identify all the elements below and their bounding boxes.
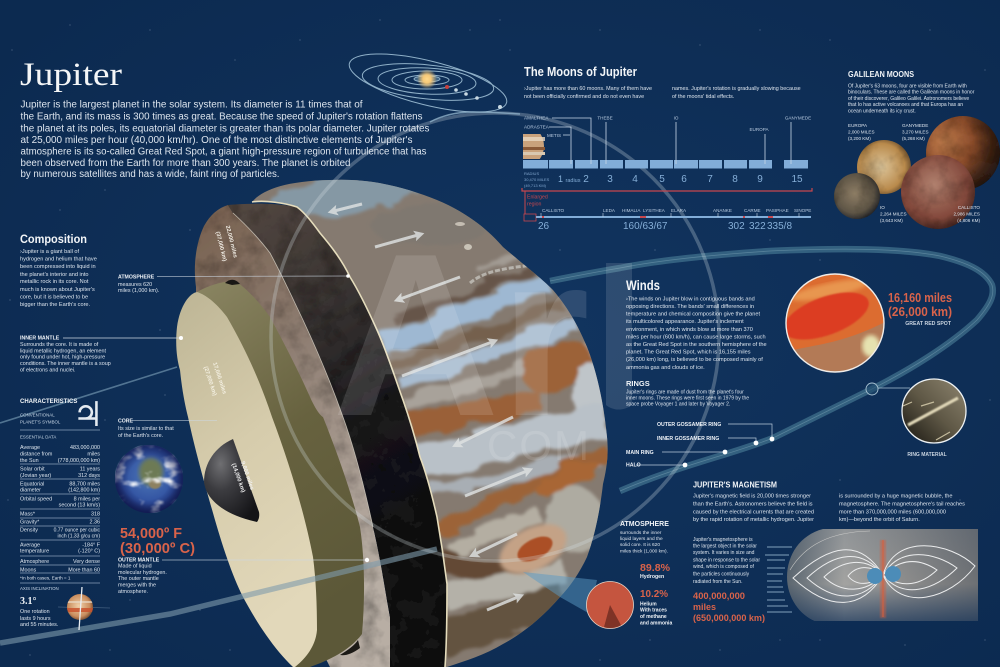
callout: inner mantle: Surrounds the core. It is made of	[20, 342, 99, 348]
outer moons scale: PASIPHAE	[766, 208, 789, 213]
moon leader lines	[549, 118, 791, 164]
data table: Moons	[20, 568, 36, 574]
callout: inner mantle: INNER MANTLE	[20, 336, 60, 342]
callout: atmosphere	[118, 274, 350, 294]
text: composition: ›Jupiter is a giant ball of	[20, 249, 80, 255]
intro text: Jupiter is the largest planet in the solar system. Its diameter is 11 times that of	[20, 100, 363, 110]
panel: atmosphere composition: surrounds the inner	[620, 530, 662, 536]
solar wind arrows	[765, 547, 792, 612]
data table: second (13 km/s)	[59, 502, 100, 508]
panel: Jupiter's magnetism: than the Earth's. Astronomers believe the field is	[693, 502, 813, 508]
outer moons scale: CARME	[744, 208, 761, 213]
outer moons scale: 322	[749, 221, 766, 232]
intro text	[20, 100, 430, 180]
moon labels: AMALTHEA	[524, 116, 549, 120]
panel: winds: environment, in which winds blow at more than 370	[626, 327, 753, 333]
panel: Galilean moons: GALILEAN MOONS	[848, 70, 915, 79]
moon labels: RADIUS	[524, 171, 539, 176]
outer moons scale: 335/8	[767, 221, 792, 232]
panel: Jupiter's magnetism	[693, 480, 978, 623]
data table: 0.77 ounce per cubic	[54, 528, 100, 534]
data table: Gravity*	[20, 520, 40, 526]
panel: Jupiter's magnetism: caused by the electrical currents that are created	[693, 510, 814, 516]
ring crossing in front of the planet	[0, 549, 437, 643]
data table: Average	[20, 445, 40, 451]
orbit radius numbers: 8	[732, 174, 738, 185]
panel: atmosphere composition: Helium	[640, 602, 657, 608]
layer measurement labels: (37,000 km)	[214, 231, 227, 262]
panel: composition	[20, 234, 97, 308]
intro text: the planet at its poles, its equatorial diameter is greater than its polar diameter. Jupiter rotates	[20, 124, 430, 134]
pie chart: atmosphere composition	[586, 582, 634, 629]
panel: Jupiter's magnetism: radiated from the Sun.	[693, 579, 742, 585]
moon labels: (5,268 KM)	[902, 136, 925, 141]
layer measurement labels: 17,000 miles	[211, 362, 227, 395]
data table: (Jovian year)	[20, 473, 51, 479]
callout: core: of the Earth's core.	[118, 433, 163, 439]
outer moons scale: 160/63/67	[623, 221, 668, 232]
panel: characteristics: CONVENTIONAL	[20, 412, 55, 418]
panel: winds	[626, 277, 767, 371]
data table: 11 years	[80, 466, 100, 472]
layer: cream outer mantle	[176, 292, 317, 667]
panel: winds: Winds	[626, 277, 660, 293]
panel: atmosphere composition: and ammonia	[640, 620, 672, 626]
data table: diameter	[20, 488, 41, 494]
panel: Galilean moons: Of Jupiter's 63 moons, four are visible from Earth with	[848, 84, 967, 90]
orbit radius numbers: 5	[659, 174, 665, 185]
panel: Galilean moons: ocean underneath its icy crust.	[848, 108, 916, 114]
callout: atmosphere: ATMOSPHERE	[118, 274, 155, 280]
stat: Great Red Spot size: 16,160 miles	[888, 291, 952, 305]
stat: core temperature: 54,000º F	[120, 525, 182, 542]
data table: More than 60	[68, 568, 100, 574]
panel: winds: (26,000 km) long, is believed to be composed mainly of	[626, 357, 763, 363]
stat: core temperature: (30,000º C)	[120, 540, 195, 557]
data table: -184° F	[82, 542, 101, 548]
data table: Atmosphere	[20, 559, 49, 565]
stat: magnetosphere size	[693, 591, 765, 623]
stat: magnetosphere size: miles	[693, 602, 716, 612]
moon labels: ADRASTEA	[524, 124, 550, 130]
intro text: at 25,000 miles per hour (40,000 km/hr). One of the most distinctive elements of Jupiter's	[20, 135, 412, 146]
moon labels: 3,270 MILES	[902, 130, 929, 134]
panel: Jupiter's magnetism: Jupiter's magnetosphere is	[693, 537, 753, 543]
panel: Jupiter's magnetism: Jupiter's magnetic field is 20,000 times stronger	[693, 494, 811, 500]
ring labels and leaders: INNER GOSSAMER RING	[657, 436, 719, 442]
panel: rings: inner moons. These rings were first seen in 1979 by the	[626, 396, 749, 402]
text: composition: metallic rock in its core. Not	[20, 279, 89, 285]
moon labels: IO	[880, 205, 885, 210]
data table: Average	[20, 542, 40, 548]
callout: core: CORE	[118, 418, 134, 424]
panel: winds: its multicolored appearance. Jupiter's inclement	[626, 319, 744, 325]
data table: Mass*	[20, 512, 36, 518]
text: composition	[20, 249, 97, 308]
data table: temperature	[20, 548, 49, 554]
intro text: been observed from the Earth for more than 300 years. The planet is orbited	[20, 158, 350, 169]
watermark lettering: Ar	[332, 206, 590, 465]
layer: olive inner mantle	[197, 282, 364, 667]
magnetosphere diagram	[787, 529, 978, 621]
data table: Solar orbit	[20, 466, 45, 472]
icon: Earth	[115, 445, 183, 513]
panel: characteristics: 3.1°	[20, 596, 36, 607]
panel: Jupiter's magnetism: JUPITER'S MAGNETISM	[693, 480, 777, 490]
ring labels and leaders: MAIN RING	[626, 450, 654, 456]
moon labels: 30,470 MILES	[524, 177, 550, 182]
panel: atmosphere composition: miles thick (1,000 km).	[620, 548, 668, 554]
moon labels: IO	[674, 116, 679, 120]
outer moons scale: HIMALIA	[622, 208, 641, 213]
data table: Equatorial	[20, 482, 44, 488]
panel: Jupiter's magnetism: magnetosphere. The magnetosphere's tail reaches	[839, 502, 965, 508]
moon labels: EUROPA	[848, 123, 868, 128]
stat: magnetosphere size: 400,000,000	[693, 591, 745, 601]
callout: outer mantle: OUTER MANTLE	[118, 558, 160, 564]
layer measurement labels: 22,000 miles	[224, 225, 238, 258]
moon labels: METIS	[547, 133, 561, 138]
moon distance bars	[523, 160, 808, 168]
ring material detail	[866, 379, 966, 458]
panel: rings: RINGS	[626, 379, 650, 388]
orbit radius numbers	[558, 174, 803, 185]
panel: atmosphere composition: of methane	[640, 614, 667, 620]
data table: 312 days	[78, 473, 100, 479]
data table: Orbital speed	[20, 496, 52, 502]
data table: (-120° C)	[78, 548, 100, 554]
outer moons scale: ANANKE	[713, 208, 732, 213]
panel: characteristics: PLANET'S SYMBOL	[20, 420, 61, 424]
data table: 318	[91, 512, 100, 518]
moon: Io	[834, 173, 880, 219]
layer measurement labels: 9,000 miles	[239, 461, 255, 491]
panel: winds: opposing directions. The bands' small differences in	[626, 304, 754, 310]
moon labels	[524, 116, 811, 188]
ring system behind the planet	[0, 249, 993, 491]
panel: the moons of Jupiter: Enlarged	[527, 194, 548, 200]
orbit radius numbers: 2	[583, 174, 589, 185]
panel: Jupiter's magnetism: the particles continuously	[693, 572, 750, 578]
panel: atmosphere composition: ATMOSPHERE	[620, 521, 669, 528]
core hemisphere	[204, 439, 259, 522]
moon labels: 2,000 MILES	[848, 130, 875, 134]
ring labels and leaders: HALO	[626, 462, 641, 468]
panel: characteristics: AXIS INCLINATION	[20, 586, 59, 591]
panel: characteristics: One rotation	[20, 609, 50, 615]
data table: Very dense	[73, 559, 100, 565]
callout: outer mantle: Made of liquid	[118, 564, 152, 570]
panel: Jupiter's magnetism: by the rapid rotation of metallic hydrogen. Jupiter	[693, 517, 814, 523]
intro text: atmosphere is its so-called Great Red Spot, a giant high-pressure region of turbulence that has	[20, 146, 426, 158]
panel: the moons of Jupiter: ›Jupiter has more than 60 moons. Many of them have	[524, 86, 652, 92]
data table: distance from	[20, 452, 53, 458]
callout: core: Its size is similar to that	[118, 426, 174, 432]
panel: winds: miles per hour (600 km/h), can cause large storms, such	[626, 334, 766, 340]
data table rules	[20, 430, 100, 583]
ring labels and leaders	[626, 422, 774, 468]
ring material detail: RING MATERIAL	[907, 452, 947, 458]
callout: inner mantle	[20, 336, 183, 374]
intro text: the Earth, and its mass is 300 times as great. Because the speed of Jupiter's rotation flattens	[20, 112, 422, 122]
panel: the moons of Jupiter: names. Jupiter's rotation is gradually slowing because	[672, 86, 801, 92]
data table: miles	[87, 452, 100, 458]
icon: Jupiter in chart	[523, 134, 545, 159]
outer moons scale: 26	[538, 221, 550, 232]
stat: core temperature	[120, 525, 195, 557]
moon labels	[848, 123, 980, 223]
panel: winds: as the Great Red Spot in the southern hemisphere of the	[626, 342, 767, 348]
moon labels: EUROPA	[749, 127, 769, 132]
moon labels: 2,986 MILES	[953, 212, 980, 216]
icon: Jupiter symbol: ♃	[73, 395, 103, 435]
data table	[20, 445, 101, 580]
stat: magnetosphere size: (650,000,000 km)	[693, 613, 765, 623]
callout: inner mantle: only found under hot, high-pressure	[20, 354, 105, 360]
callout: core	[118, 418, 217, 439]
cutaway planet	[0, 167, 620, 667]
panel: winds: temperature and chemical composition give the planet	[626, 312, 760, 318]
callout: outer mantle: merges with the	[118, 582, 156, 588]
moon labels: GANYMEDE	[902, 123, 928, 128]
layer measurement labels	[202, 225, 255, 494]
data table: 2.36	[90, 520, 100, 526]
panel: Jupiter's magnetism: is surrounded by a huge magnetic bubble, the	[839, 494, 953, 500]
text: composition: bigger than the Earth's core.	[20, 302, 91, 308]
panel: Galilean moons: that Io has active volcanoes and that Europa has an	[848, 102, 963, 108]
intro text: by numerous satellites and has a wide, faint ring of particles.	[20, 169, 280, 180]
layer: brown shell	[195, 205, 390, 667]
layer: planet surface	[240, 167, 620, 667]
outer moons scale: SINOPE	[794, 208, 811, 213]
moon: Callisto	[901, 155, 975, 229]
moon labels: (4,806 KM)	[957, 218, 980, 223]
outer moons scale: 302	[728, 221, 745, 232]
panel: the moons of Jupiter: The Moons of Jupiter	[524, 64, 637, 79]
data table: 483,000,000	[70, 445, 100, 451]
text: composition: core, but it is believed to be	[20, 294, 88, 300]
panel: Jupiter's magnetism: shape in response to the solar	[693, 558, 760, 564]
moon labels: (3,643 KM)	[880, 218, 903, 223]
panel: atmosphere composition: 89.8%	[640, 562, 671, 574]
surface rim	[252, 201, 447, 667]
data table: the Sun	[20, 458, 39, 464]
title: Jupiter	[20, 57, 122, 93]
callout: inner mantle: liquid metallic hydrogen, an element	[20, 348, 107, 354]
text: composition: the planet's interior and into	[20, 272, 89, 278]
panel: rings: space probe Voyager 1 and later by Voyager 2.	[626, 402, 730, 408]
panel: rings: Jupiter's rings are made of dust from the planet's four	[626, 390, 744, 396]
outer moons scale: CALLISTO	[542, 208, 565, 213]
panel: characteristics: and 55 minutes.	[20, 622, 58, 628]
data table: Density	[20, 528, 38, 534]
orbit radius numbers: 9	[757, 174, 763, 185]
callout: outer mantle: molecular hydrogen.	[118, 570, 167, 576]
panel: Galilean moons	[834, 70, 1000, 229]
orbit radius numbers: 3	[607, 174, 613, 185]
outer moons scale: ELARA	[671, 208, 687, 213]
callout: inner mantle: conditions. The inner mantle is a soup	[20, 361, 111, 367]
panel: atmosphere composition: solid core. It is 620	[620, 542, 660, 548]
moon labels: (49,713 KM)	[524, 183, 547, 188]
panel: Galilean moons: binoculars. These are called the Galilean moons in honor	[848, 90, 975, 96]
panel: winds: planet. The Great Red Spot, which is 16,155 miles	[626, 350, 751, 356]
panel: winds: ›The winds on Jupiter blow in contiguous bands and	[626, 296, 755, 302]
orbit radius numbers: 4	[632, 174, 638, 185]
orbit radius numbers: 6	[681, 174, 687, 185]
text: composition: been compressed into liquid in	[20, 264, 96, 270]
solar system diagram	[344, 42, 520, 124]
panel: Jupiter's magnetism: km)—beyond the orbit of Saturn.	[839, 517, 920, 523]
orbit radius numbers: 1 radius	[558, 174, 581, 184]
callout: outer mantle: The outer mantle	[118, 576, 159, 582]
outer moons scale: LEDA	[603, 208, 616, 213]
panel: characteristics	[20, 395, 110, 630]
panel: the moons of Jupiter: not been officially confirmed and do not even have	[524, 94, 644, 100]
moon labels: THEBE	[597, 116, 613, 120]
layer measurement labels: (14,000 km)	[230, 463, 246, 494]
data table: (142,800 km)	[68, 488, 100, 494]
panel: atmosphere composition: liquid layers and the	[620, 536, 663, 542]
stat: Great Red Spot size	[888, 291, 952, 327]
panel: Jupiter's magnetism: the largest object in the solar	[693, 544, 757, 550]
enlarged region bracket	[522, 188, 812, 221]
data table: inch (1.33 g/cu cm)	[57, 534, 100, 540]
watermark circle	[271, 113, 719, 561]
panel: Jupiter's magnetism: more than 370,000,000 miles (600,000,000	[839, 510, 946, 516]
Great Red Spot detail	[785, 273, 885, 373]
panel: the moons of Jupiter: region	[527, 202, 542, 208]
text: composition: hydrogen and helium that have	[20, 256, 97, 262]
text: composition: much is known about Jupiter's	[20, 287, 95, 293]
orbit radius numbers: 15	[791, 174, 803, 185]
data table: (778,000,000 km)	[58, 458, 100, 464]
callout: outer mantle: atmosphere.	[118, 589, 148, 595]
panel: atmosphere composition: 10.2%	[640, 588, 669, 600]
panel: atmosphere composition: Hydrogen	[640, 574, 664, 580]
outer moons scale: LYSITHEA	[643, 208, 666, 213]
heading: composition: Composition	[20, 234, 87, 246]
moon: Ganymede	[926, 116, 1000, 190]
data table: *In both cases, Earth = 1	[20, 576, 71, 580]
layer measurement labels: (27,000 km)	[202, 366, 217, 397]
icon: Jupiter axis inclination	[58, 587, 110, 630]
moon labels: CALLISTO	[958, 205, 980, 210]
panel: characteristics: CHARACTERISTICS	[20, 399, 77, 405]
stat: Great Red Spot size: GREAT RED SPOT	[905, 321, 952, 327]
data table: 8 miles per	[74, 496, 100, 502]
callout: atmosphere: measures 620	[118, 282, 152, 288]
panel: atmosphere composition: With traces	[640, 608, 667, 614]
callout: atmosphere: miles (1,000 km).	[118, 288, 159, 294]
panel: winds: ammonia gas and clouds of ice.	[626, 365, 705, 371]
panel: characteristics: lasts 9 hours	[20, 616, 51, 622]
moon labels: (3,200 KM)	[848, 136, 871, 141]
panel: Jupiter's magnetism: system. It varies in size and	[693, 550, 755, 556]
panel: characteristics: ESSENTIAL DATA	[20, 434, 56, 440]
ring labels and leaders: OUTER GOSSAMER RING	[657, 422, 721, 428]
layer: dark shell	[228, 204, 447, 667]
wind arrows on the surface	[334, 204, 527, 610]
panel: the moons of Jupiter: of the moons' tidal effects.	[672, 94, 734, 100]
moon: Europa	[857, 140, 911, 194]
moon labels: GANYMEDE	[785, 116, 811, 120]
panel: rings	[626, 379, 774, 468]
moon labels: 2,264 MILES	[880, 212, 907, 216]
stat: Great Red Spot size: (26,000 km)	[888, 305, 952, 319]
callout: inner mantle: of electrons and nuclei.	[20, 368, 75, 374]
data table: 88,700 miles	[69, 482, 100, 488]
panel: Jupiter's magnetism: wind, which is composed of	[693, 564, 754, 570]
callout: outer mantle	[118, 558, 369, 595]
panel: atmosphere composition	[620, 521, 672, 626]
panel: Galilean moons: of their discoverer, Galileo Galilei. Astronomers believe	[848, 96, 969, 102]
orbit radius numbers: 7	[707, 174, 713, 185]
outer moons scale	[536, 208, 811, 232]
atmosphere pie connector	[523, 572, 597, 614]
watermark lettering: COM	[487, 422, 591, 469]
panel: the moons of Jupiter	[500, 64, 812, 232]
